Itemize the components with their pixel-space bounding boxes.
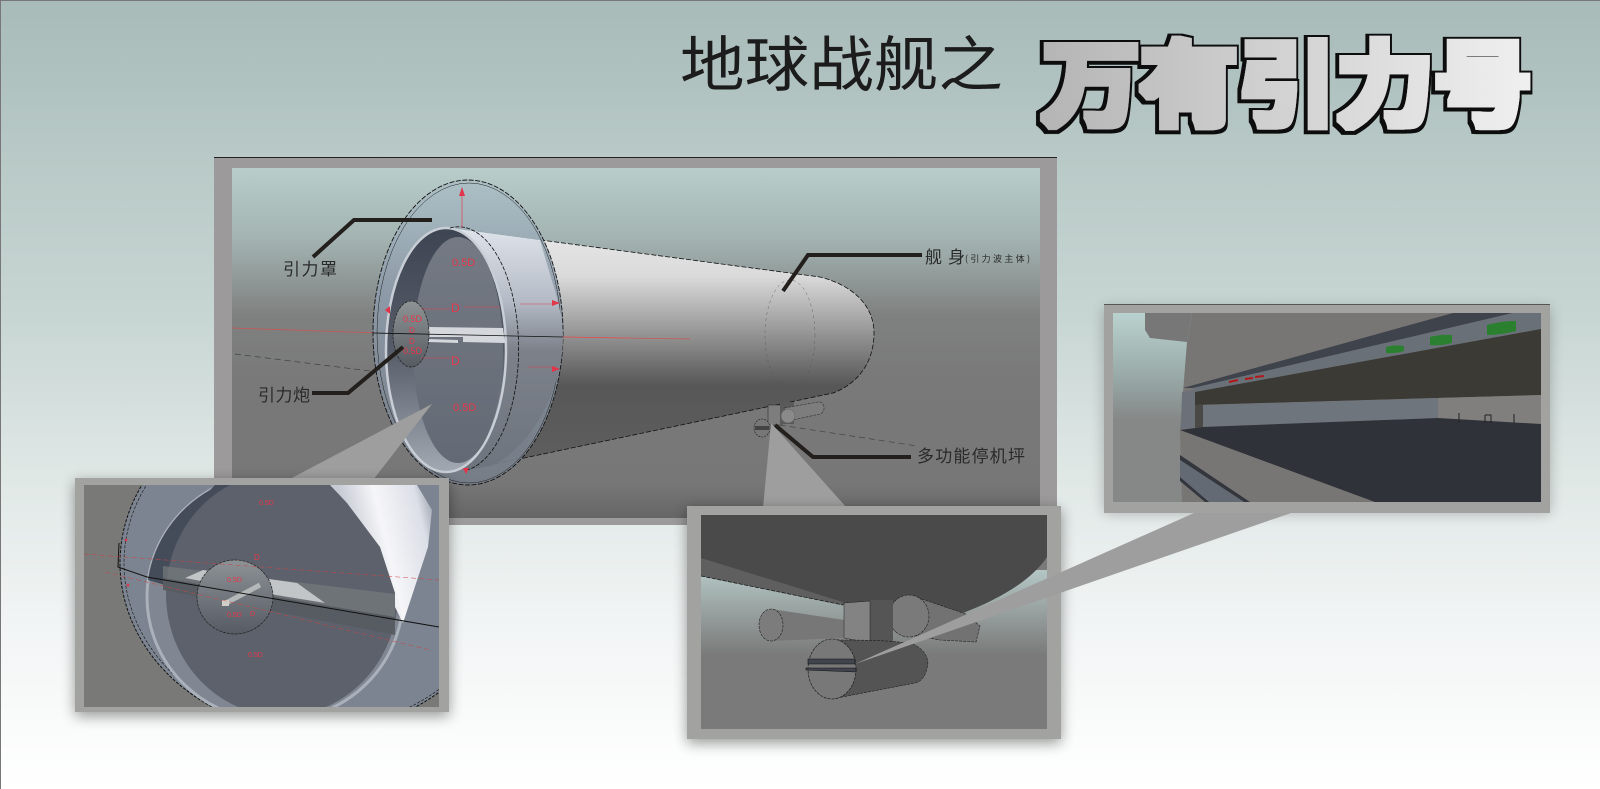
gravity cannon and slot [373,301,630,367]
label: hull: (引力波主体) [965,252,1030,265]
panel: main ship view [214,157,1057,525]
red dimension marks: D [409,337,415,346]
red dimension marks: D [409,326,415,335]
red dimension marks: 0.5D [403,314,423,324]
label: gravity shield [283,220,432,280]
landing pad under hull [754,402,824,437]
label: gravity cannon: 引力炮 [258,381,310,406]
panel: landing pad close-up [687,506,1061,743]
close-up dimension text: 0.5D [227,612,242,619]
panel: hangar interior close-up [1104,304,1550,513]
label: multi-function landing pad [775,425,1025,467]
red dimension marks: 0.5D [453,402,476,414]
title: subtitle 地球战舰之: 地球战舰之 [680,17,1003,104]
red dimension marks [385,187,560,474]
callout pointer: to cannon detail [288,404,432,480]
close-up dimension text: 0.5D [227,577,242,584]
label: hull [783,243,1030,291]
label: multi-function landing pad: 多功能停机坪 [917,442,1025,467]
main panel frame [214,157,1057,525]
title: ship name 万有引力号: 万有引力号 [1042,12,1532,145]
red dimension marks: D [451,354,460,368]
red dimension marks: D [451,301,460,315]
close-up dimension text: D [250,611,255,618]
label: hull: 舰身 [925,243,965,268]
label: gravity shield: 引力罩 [283,255,337,280]
close-up dimension text: D [254,553,260,562]
label: gravity cannon [258,347,403,406]
close-up dimension text: 0.5D [248,652,263,659]
panel: gravity cannon close-up [66,473,458,725]
close-up dimension text: 0.5D [259,500,274,507]
close-up dimension text [125,500,274,659]
callout pointer: to hangar detail [855,513,1291,664]
green deck pads [1386,321,1516,353]
red dimension marks: 0.5D [403,346,423,356]
red dimension marks: 0.5D [452,257,475,269]
gravity shield disc [373,180,563,485]
ship hull [450,228,874,470]
callout pointer: to landing pad detail [763,423,847,508]
